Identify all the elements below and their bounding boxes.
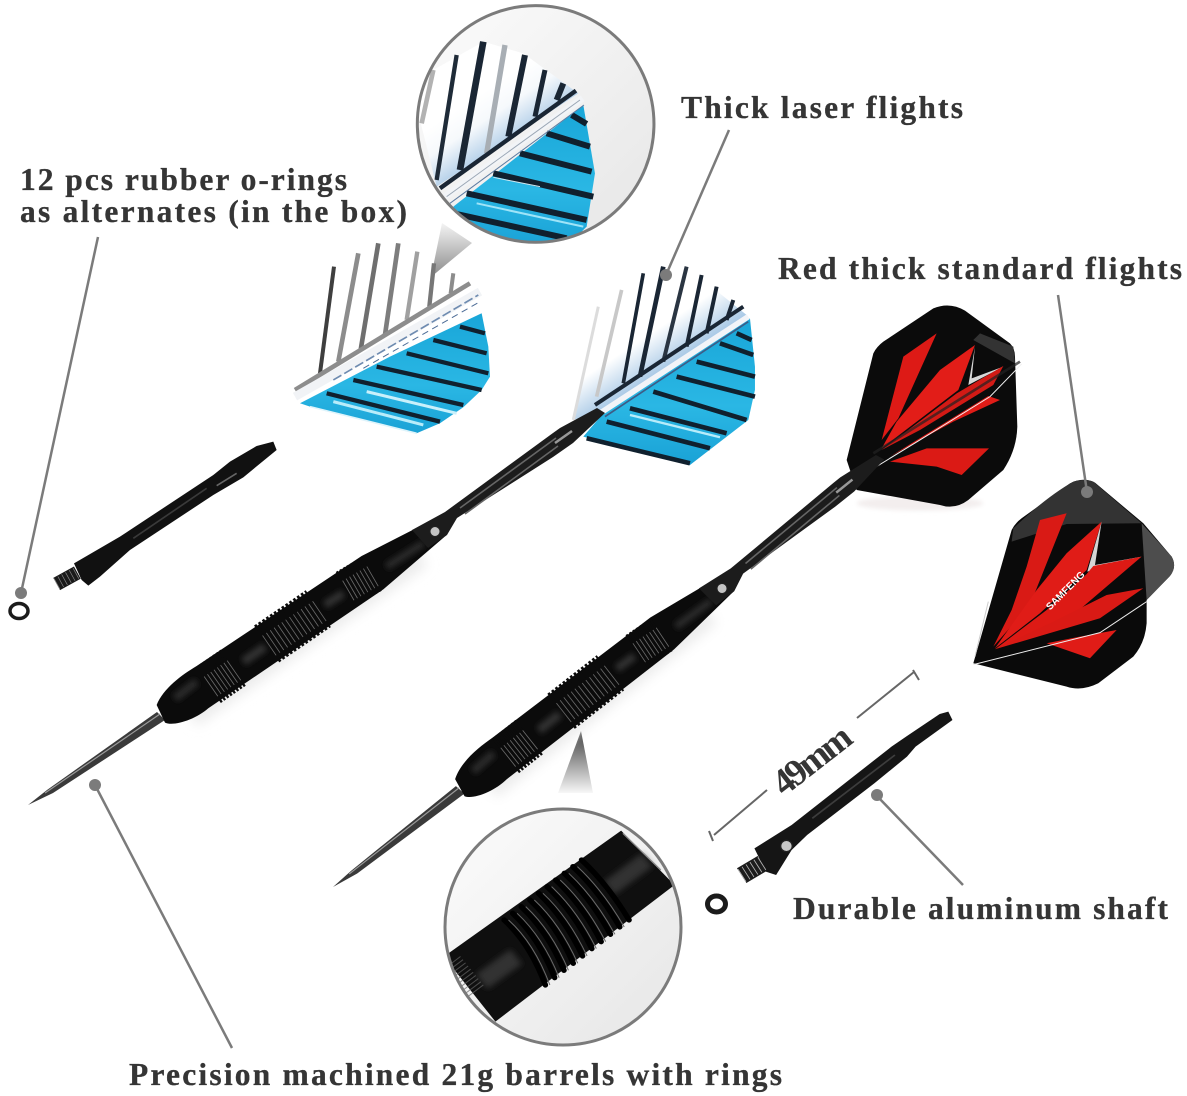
flight logo: SAMFENG <box>1044 569 1088 613</box>
dart: red flight dart body <box>308 455 909 887</box>
leader: laser flights <box>660 130 729 281</box>
callout lens: bottom triangle <box>558 731 593 793</box>
leader: red flights <box>1058 295 1093 498</box>
zoom circle: flight detail <box>417 6 654 247</box>
zoom circle: barrel detail <box>444 809 681 1045</box>
label: aluminum shaft: Durable aluminum shaft <box>793 891 1168 926</box>
flight: blue laser flight on dart <box>573 267 755 465</box>
dart: blue flight dart body <box>28 408 605 805</box>
leader: o-rings <box>15 237 98 599</box>
flight: loose red flight, right <box>973 480 1174 689</box>
flight: red flight on dart <box>847 305 1022 511</box>
spare shaft: left <box>57 442 277 586</box>
icon: o-ring, right <box>708 896 726 912</box>
dimension: 49mm <box>709 670 919 841</box>
leader: barrels <box>89 779 232 1048</box>
label: o-rings second line: as alternates (in the box) <box>20 194 407 229</box>
label: o-rings: 12 pcs rubber o-rings <box>20 162 347 197</box>
icon: o-ring, left <box>10 604 28 618</box>
leader: aluminum shaft <box>871 789 963 885</box>
label: thick laser flights: Thick laser flights <box>681 90 963 125</box>
flight: loose blue flight, left <box>295 243 490 433</box>
label: red flights: Red thick standard flights <box>778 251 1182 286</box>
dimension: 49mm: 49mm <box>764 716 861 804</box>
callout lens: top triangle <box>431 223 472 277</box>
spare shaft: right with size <box>742 712 952 876</box>
label: barrels: Precision machined 21g barrels with rings <box>129 1057 782 1092</box>
